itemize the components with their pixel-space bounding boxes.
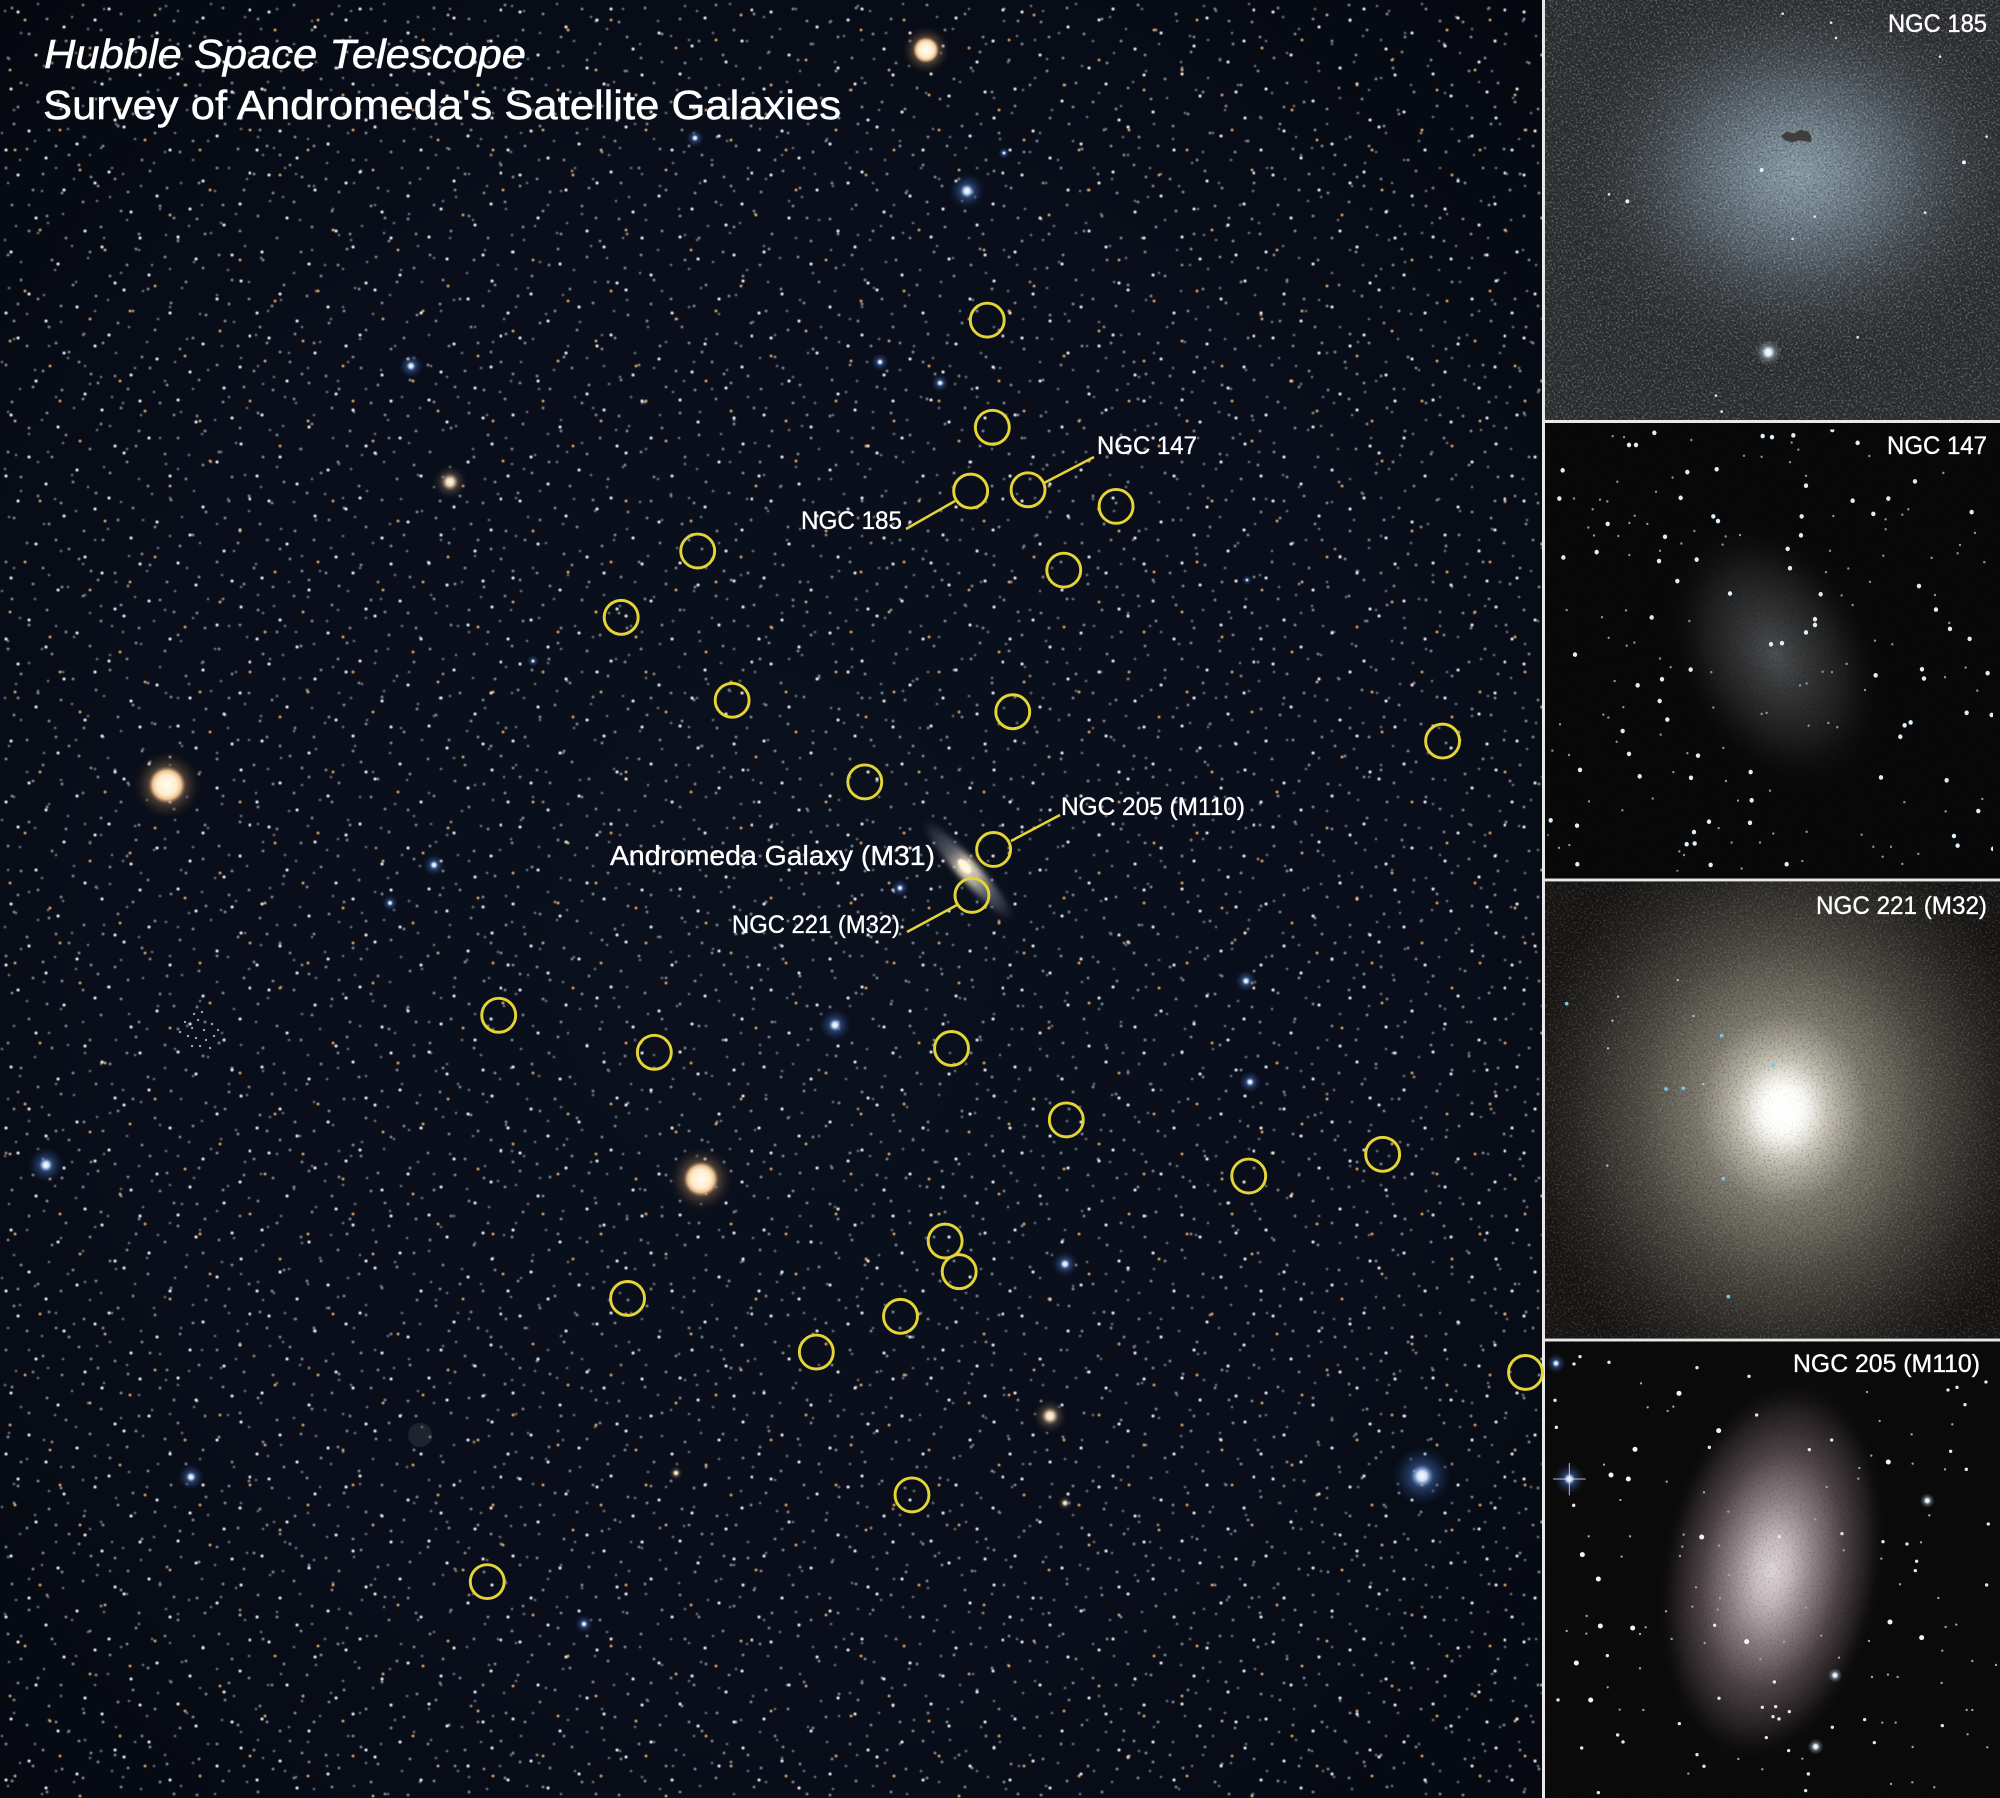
star cluster (180, 1012, 218, 1048)
callout: NGC 205 (M110) (1011, 793, 1245, 841)
bright foreground stars (28, 26, 1452, 1633)
title: Survey of Andromeda's Satellite Galaxies (43, 82, 841, 128)
callout: NGC 205 (M110): NGC 205 (M110) (1061, 793, 1245, 821)
callout: NGC 185 (801, 501, 955, 535)
field stars (1546, 1353, 1996, 1793)
label: NGC 221 (M32): NGC 221 (M32) (1816, 892, 1987, 920)
title (43, 31, 841, 128)
field stars (1609, 14, 1987, 412)
panel: NGC 205 (M110) (1545, 1342, 2000, 1798)
panel: NGC 185 (1545, 0, 2000, 420)
annotation circles: satellite galaxies (470, 303, 1542, 1599)
panel: wide-field star map (0, 0, 1542, 1798)
callout: NGC 185: NGC 185 (801, 507, 902, 535)
panel dividers (1542, 0, 2000, 1798)
callout: NGC 221 (M32): NGC 221 (M32) (732, 911, 900, 939)
dust patch (1781, 130, 1811, 142)
Andromeda Galaxy core (926, 824, 1010, 917)
label: NGC 147: NGC 147 (1887, 432, 1987, 460)
panel: NGC 221 (M32) (1545, 882, 2000, 1338)
panel: NGC 147 (1545, 423, 2000, 878)
label: NGC 205 (M110): NGC 205 (M110) (1793, 1350, 1980, 1378)
callout: NGC 147: NGC 147 (1097, 432, 1197, 460)
blue field stars (1567, 980, 1773, 1297)
callout: NGC 221 (M32) (732, 905, 957, 939)
callout: NGC 147 (1044, 432, 1197, 483)
label: NGC 185: NGC 185 (1888, 10, 1987, 38)
field stars (1548, 430, 1993, 871)
title: Hubble Space Telescope (44, 31, 526, 77)
label: Andromeda Galaxy (M31): Andromeda Galaxy (M31) (610, 840, 935, 871)
